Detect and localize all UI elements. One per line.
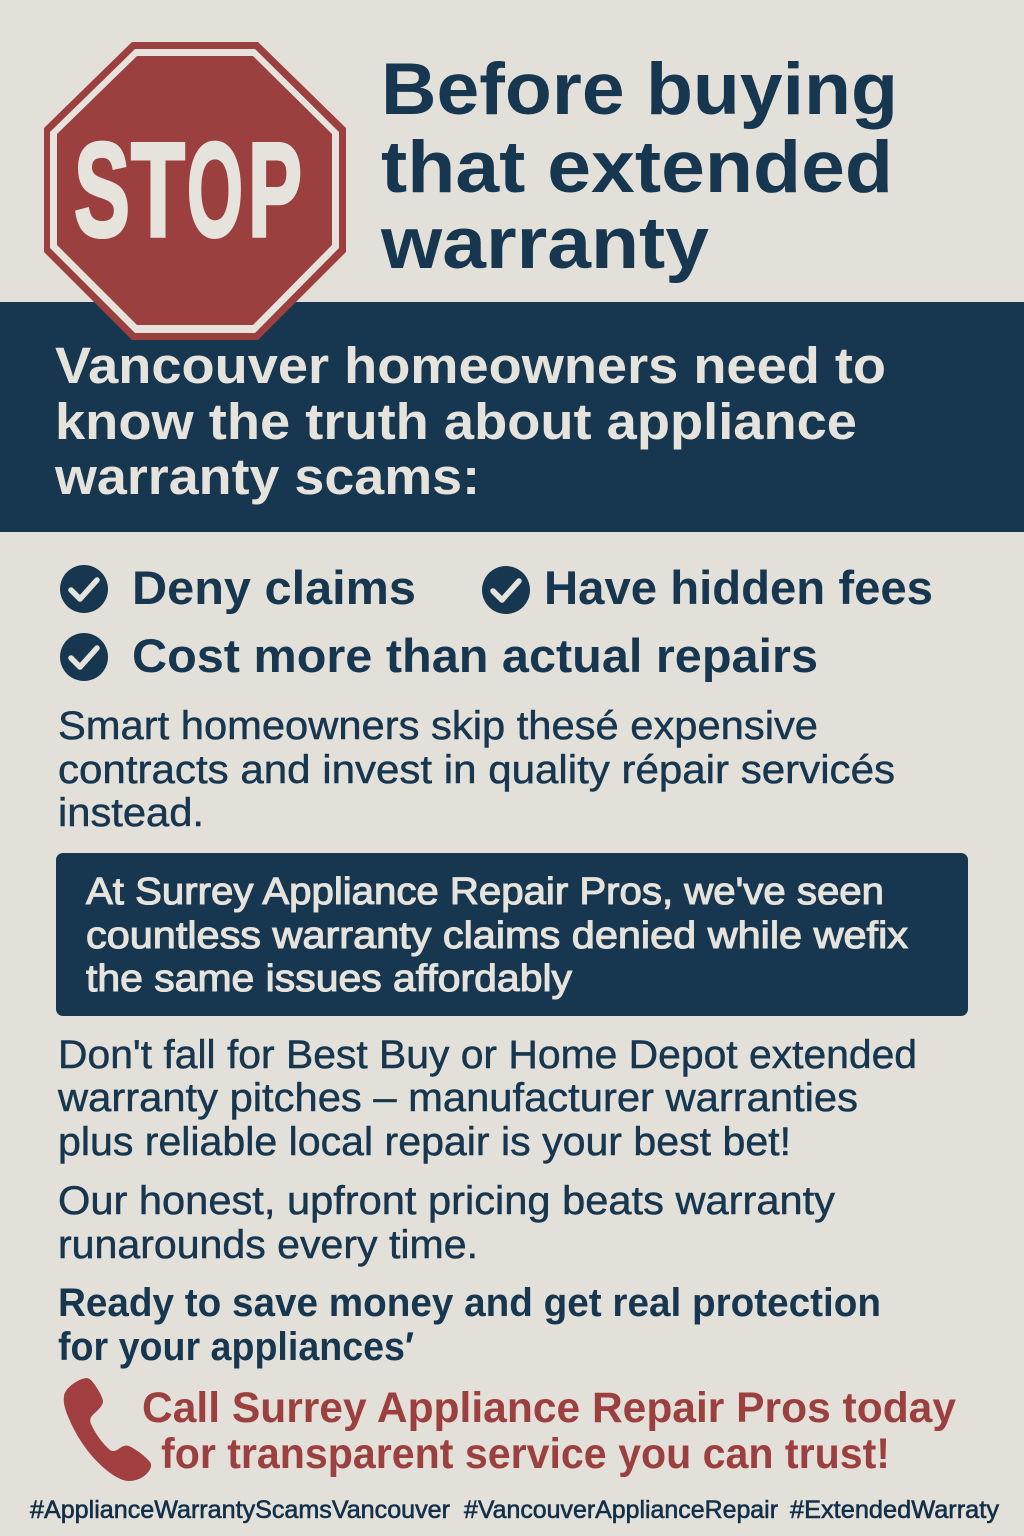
text block: retailer warranty pitches [57,1033,917,1164]
title: warranty [380,203,709,284]
icon: stop sign: O [187,116,243,265]
text block: ready to save [58,1281,881,1369]
banner: subtitle: warranty scams: [54,448,480,505]
call to action: for transparent service you can trust! [161,1430,890,1478]
text block: retailer warranty pitches: plus reliable local repair is your best bet! [58,1120,791,1164]
title: that extended [381,127,893,208]
callout: surrey appliance repair pros: At Surrey Appliance Repair Pros, we've seen [86,871,884,913]
hashtags: #VancouverApplianceRepair [464,1496,778,1524]
call to action: Call Surrey Appliance Repair Pros today [142,1384,956,1432]
text block: smart homeowners: Smart homeowners skip thesé expensive [58,704,818,748]
hashtags: #ExtendedWarraty [790,1496,999,1524]
item: cost more: Cost more than actual repairs [132,629,818,682]
text block: smart homeowners: instead. [58,791,204,835]
banner: subtitle: know the truth about appliance [55,393,857,450]
callout: surrey appliance repair pros: countless warranty claims denied while wefix [86,915,908,957]
checklist [60,561,933,682]
text block: honest pricing [58,1179,835,1267]
banner: subtitle: Vancouver homeowners need to [55,337,886,394]
hashtags: #ApplianceWarrantyScamsVancouver [30,1496,450,1524]
icon: stop sign: S [74,116,130,265]
banner: subtitle [0,302,1024,532]
title [380,49,898,284]
text block: retailer warranty pitches: warranty pitches – manufacturer warranties [57,1076,858,1120]
text block: honest pricing: Our honest, upfront pricing beats warranty [58,1179,835,1223]
text block: smart homeowners [58,704,895,835]
hashtags [30,1496,999,1524]
icon: stop sign [44,42,346,340]
item: hidden fees: Have hidden fees [544,561,933,614]
text block: honest pricing: runarounds every time. [58,1223,478,1267]
text block: smart homeowners: contracts and invest in quality répair servicés [58,748,895,792]
callout: surrey appliance repair pros: the same issues affordably [86,958,572,1000]
text block: ready to save: for your appliances′ [58,1325,414,1369]
callout: surrey appliance repair pros [56,853,968,1016]
item: deny claims: Deny claims [132,561,416,614]
icon: stop sign: T [131,116,185,265]
call to action [142,1384,956,1478]
text block: ready to save: Ready to save money and get real protection [58,1281,881,1325]
title: Before buying [381,49,898,130]
text block: retailer warranty pitches: Don't fall for Best Buy or Home Depot extended [58,1033,917,1077]
icon: phone [64,1378,151,1481]
icon: stop sign: P [248,116,302,265]
